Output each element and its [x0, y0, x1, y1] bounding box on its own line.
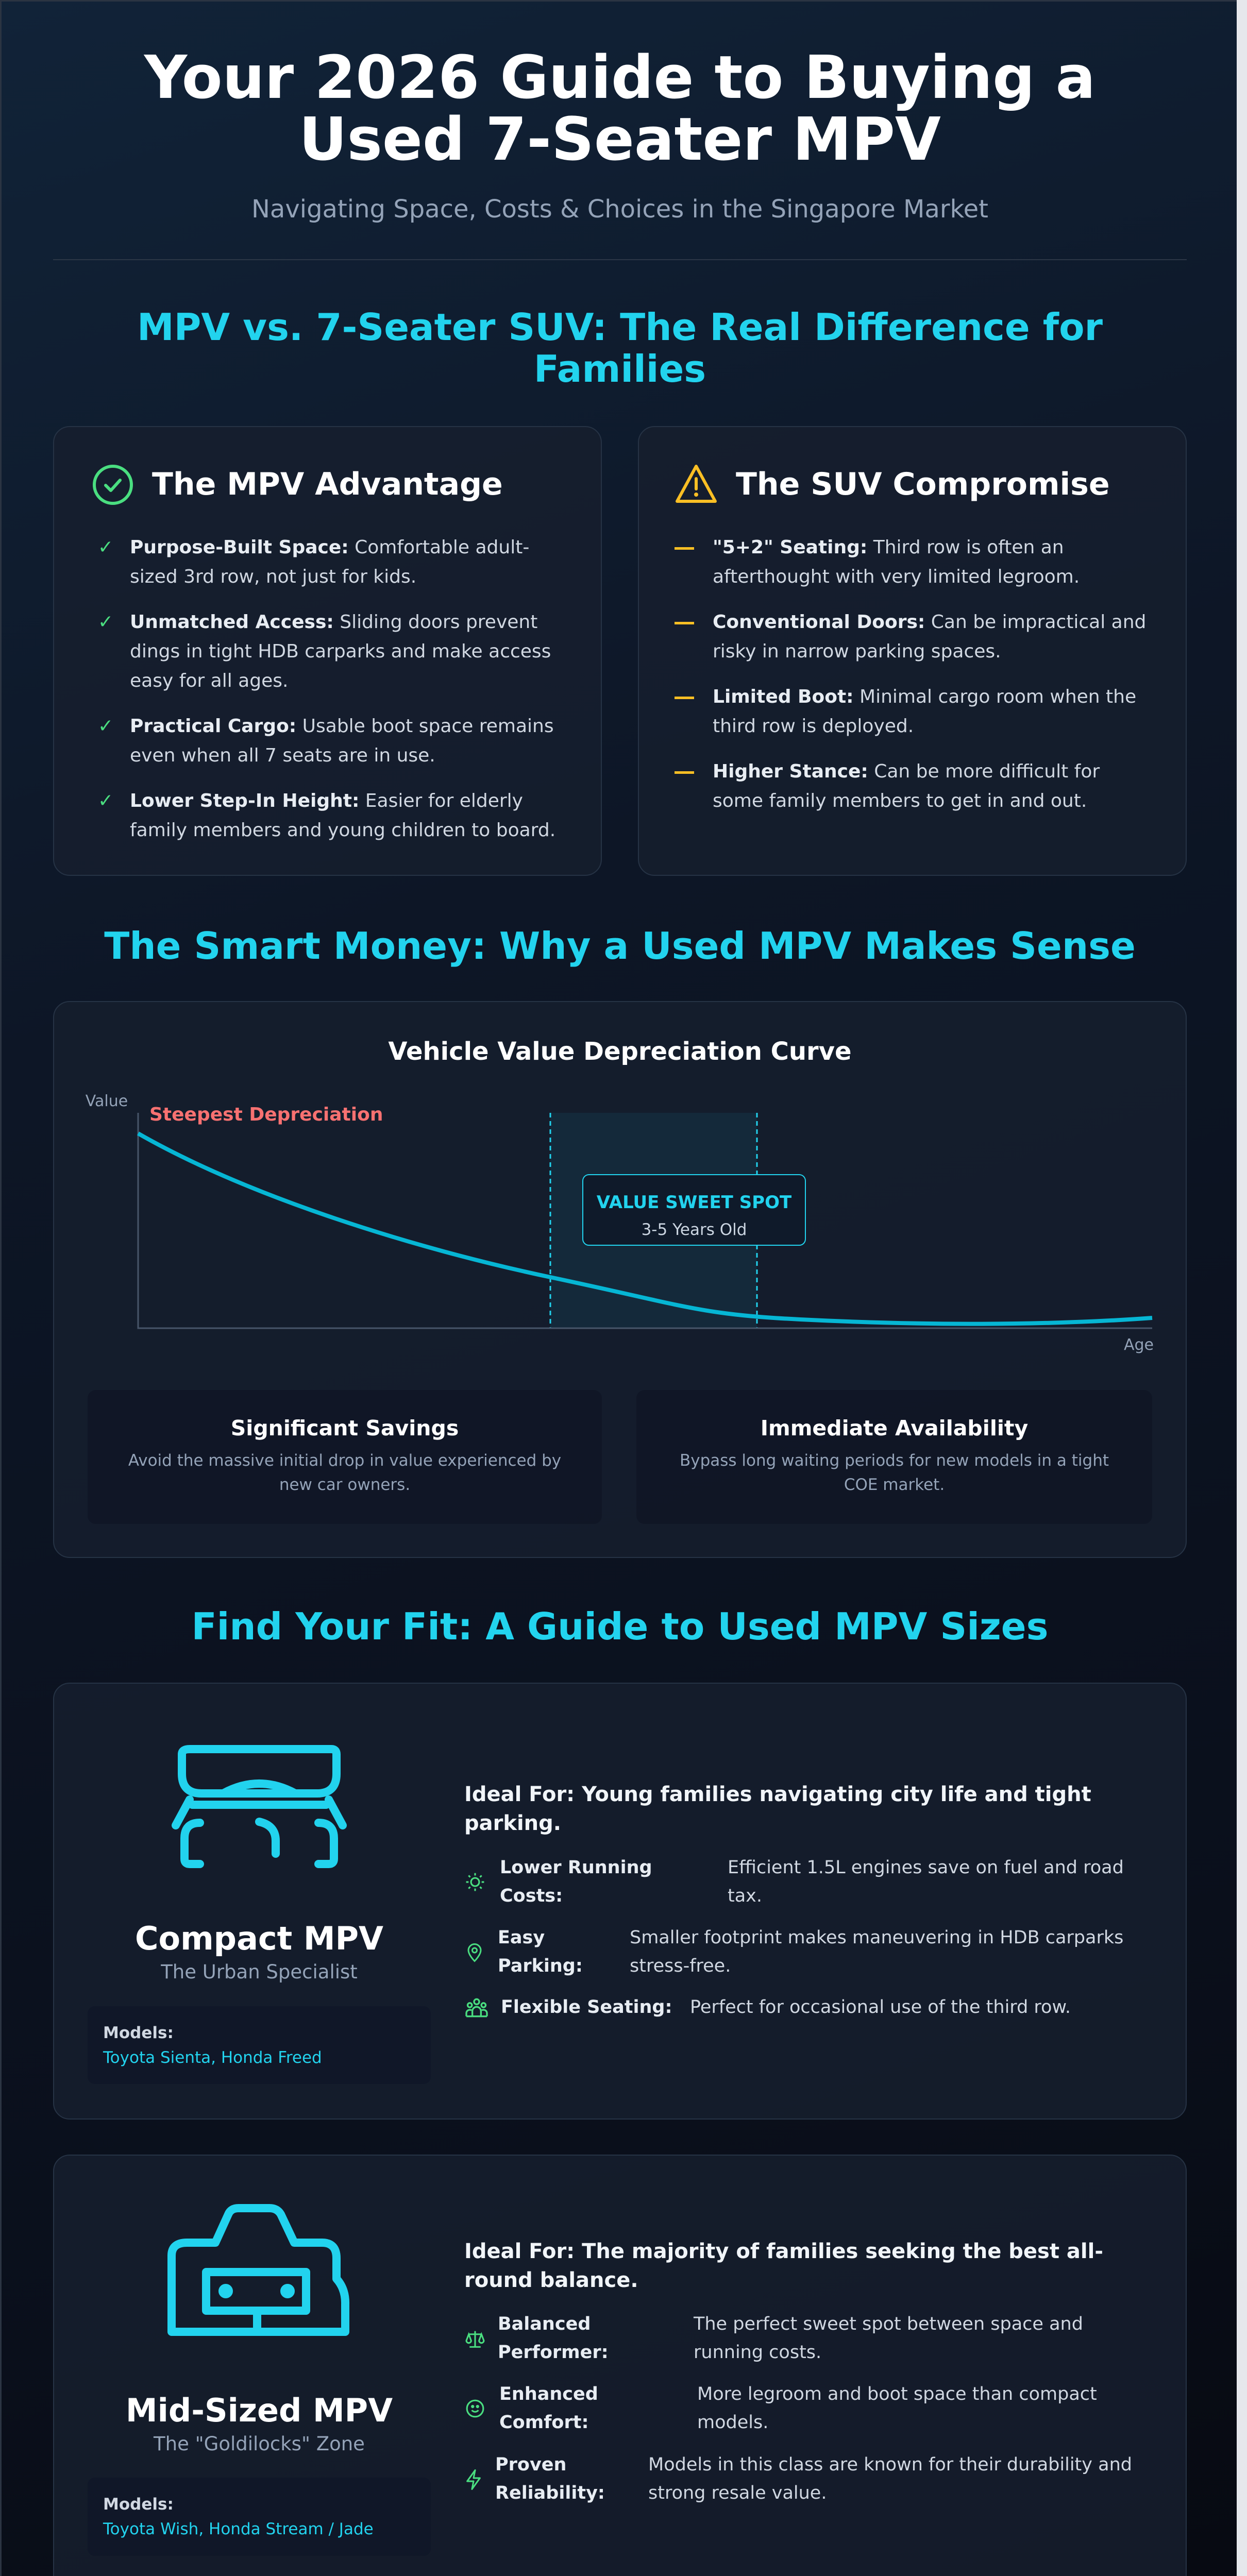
feature: lower running costs: Lower Running Costs:: [500, 1857, 652, 1906]
list: advantages: Practical Cargo: Usable boot space remains even when all 7 seats are in use.: [130, 716, 554, 766]
panel: MPV advantage: ✓: [98, 537, 113, 558]
card: significant savings: [88, 1390, 602, 1524]
feature: flexible seating: Perfect for occasional use of the third row.: [690, 1997, 1071, 2018]
models: mid-sized: Models:: [103, 2495, 174, 2514]
feature: flexible seating: [465, 1997, 1071, 2018]
feature: balanced performer: [466, 2314, 1083, 2363]
chart: depreciation curve: Vehicle Value Depreciation Curve: [388, 1037, 852, 1066]
list: compromises: Limited Boot: Minimal cargo room when the third row is deployed.: [713, 686, 1136, 737]
panel: SUV compromise: [638, 426, 1187, 876]
models: mid-sized: [88, 2478, 431, 2556]
list: compromises: "5+2" Seating: Third row is often an afterthought with very limited legroom.: [713, 537, 1080, 587]
feature: easy parking: Smaller footprint makes maneuvering in HDB carparks stress-free.: [630, 1927, 1123, 1976]
card: immediate availability: [636, 1390, 1152, 1524]
feature: proven reliability: Models in this class are known for their durability and strong resale value.: [648, 2454, 1132, 2503]
heading: find your fit: Find Your Fit: A Guide to Used MPV Sizes: [192, 1605, 1048, 1648]
text: mid ideal for: Ideal For: The majority of families seeking the best all-round balance.: [464, 2240, 1103, 2292]
panel: mid-sized MPV: [53, 2155, 1187, 2576]
panel: depreciation chart: [53, 1001, 1187, 1558]
icon: mid-sized car: [167, 2204, 349, 2336]
text: The "Goldilocks" Zone: [154, 2433, 365, 2455]
chart: depreciation curve: Age: [1124, 1336, 1154, 1354]
feature: flexible seating: Flexible Seating:: [501, 1997, 672, 2018]
feature: enhanced comfort: Enhanced Comfort:: [499, 2384, 598, 2433]
list: advantages: [98, 537, 555, 841]
heading: MPV vs SUV: [137, 306, 1103, 391]
heading: smart money: The Smart Money: Why a Used MPV Makes Sense: [104, 924, 1136, 968]
list: advantages: Lower Step-In Height: Easier for elderly family members and young children to board.: [130, 790, 555, 841]
list: compromises: Conventional Doors: Can be impractical and risky in narrow parking spaces.: [713, 612, 1146, 662]
subtitle: Navigating Space, Costs & Choices in the Singapore Market: [251, 195, 988, 224]
models: compact: Toyota Sienta, Honda Freed: [103, 2048, 322, 2067]
text: compact ideal for: Ideal For: Young families navigating city life and tight parking.: [464, 1783, 1091, 1835]
feature: enhanced comfort: [466, 2384, 1097, 2433]
models: compact: [88, 2006, 431, 2084]
panel: compact MPV: [53, 1683, 1187, 2120]
title: Used 7-Seater MPV: [299, 105, 941, 174]
feature: easy parking: Easy Parking:: [498, 1927, 583, 1976]
heading: MPV vs SUV: MPV vs. 7-Seater SUV: The Real Difference for: [137, 306, 1103, 349]
panel: MPV advantage: ✓: [98, 790, 113, 811]
feature: proven reliability: Proven Reliability:: [495, 2454, 605, 2503]
heading: MPV vs SUV: Families: [534, 347, 706, 391]
card: immediate availability: Immediate Availability: [761, 1416, 1028, 1440]
title: [143, 43, 1096, 174]
icon: warning triangle: [676, 465, 717, 503]
feature: balanced performer: Balanced Performer:: [498, 2314, 609, 2363]
heading: SUV compromise: The SUV Compromise: [736, 466, 1110, 502]
text: compact title: Compact MPV: [135, 1920, 383, 1957]
card: immediate availability: Bypass long waiting periods for new models in a tight COE market.: [680, 1451, 1109, 1494]
feature: balanced performer: The perfect sweet spot between space and running costs.: [694, 2314, 1083, 2363]
text: mid-sized title: Mid-Sized MPV: [126, 2392, 393, 2429]
icon: compact car: [172, 1745, 347, 1868]
title: Your 2026 Guide to Buying a: [144, 43, 1096, 112]
list: advantages: Unmatched Access: Sliding doors prevent dings in tight HDB carparks and make access easy for all ages.: [130, 612, 551, 691]
models: compact: Models:: [103, 2024, 174, 2042]
panel: MPV advantage: [53, 426, 602, 876]
chart: depreciation curve: Steepest Depreciation: [149, 1104, 383, 1125]
card: significant savings: Significant Savings: [231, 1416, 459, 1440]
feature: lower running costs: Efficient 1.5L engines save on fuel and road tax.: [728, 1857, 1124, 1906]
panel: MPV advantage: ✓: [98, 612, 113, 633]
models: mid-sized: Toyota Wish, Honda Stream / Jade: [103, 2520, 374, 2538]
list: compromises: Higher Stance: Can be more difficult for some family members to get in and out.: [713, 761, 1100, 811]
icon: green check circle: [93, 465, 133, 505]
heading: MPV advantage: The MPV Advantage: [152, 466, 503, 502]
chart: depreciation curve: VALUE SWEET SPOT: [597, 1192, 792, 1213]
feature: enhanced comfort: More legroom and boot space than compact models.: [697, 2384, 1097, 2433]
text: The Urban Specialist: [161, 1961, 358, 1983]
panel: MPV advantage: ✓: [98, 716, 113, 737]
chart: depreciation curve: [86, 1037, 1154, 1354]
list: advantages: Purpose-Built Space: Comfortable adult-sized 3rd row, not just for kids.: [130, 537, 529, 587]
card: significant savings: Avoid the massive initial drop in value experienced by new car owners.: [128, 1451, 561, 1494]
chart: depreciation curve: Value: [86, 1092, 128, 1110]
chart: depreciation curve: 3-5 Years Old: [642, 1221, 747, 1239]
list: compromises: [675, 537, 1146, 811]
feature: lower running costs: [466, 1857, 1124, 1906]
